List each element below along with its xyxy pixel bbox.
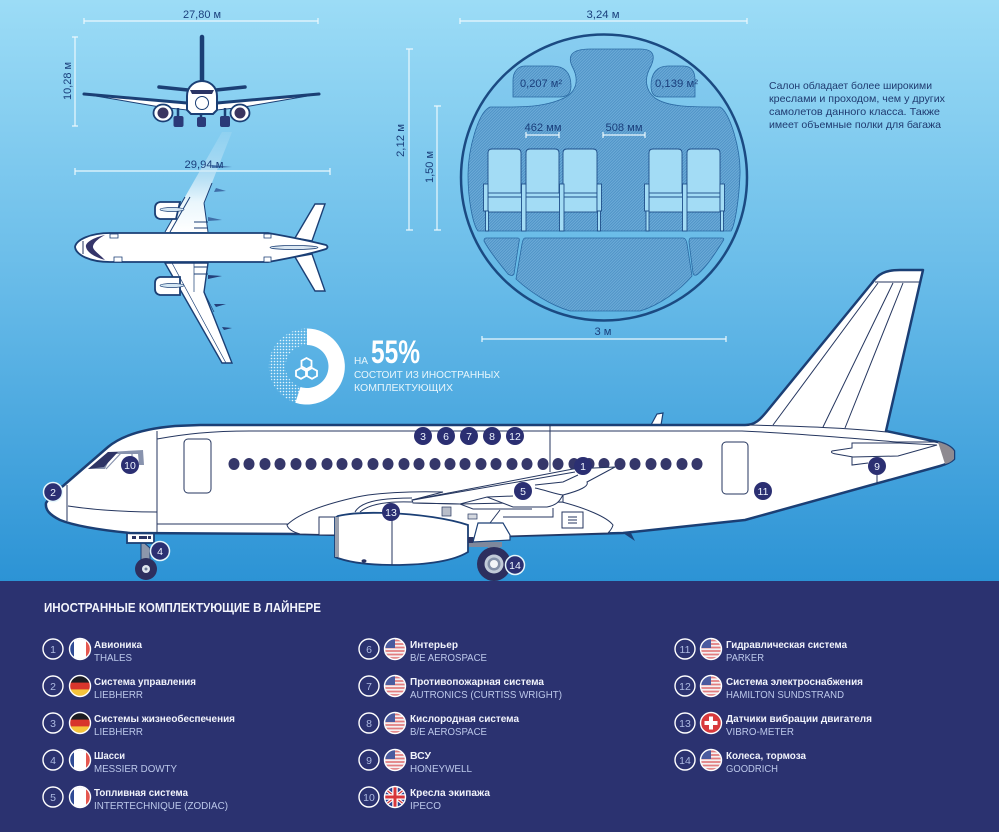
upper wing faded [165,132,232,232]
lower right bay [689,238,724,275]
tail cone [938,442,954,464]
legend column 2: B/E AEROSPACE [410,652,487,664]
legend column 3 [675,638,872,775]
lower left bay [484,238,519,276]
legend column 1: Системы жизнеобеспечения [94,713,235,725]
legend column 2: Противопожарная система [410,676,544,688]
seat width labels [524,122,645,138]
doors [184,439,211,493]
legend column 2: HONEYWELL [410,763,472,775]
legend column 2: ВСУ [410,750,431,762]
callout badges on aircraft: 10 [124,460,136,472]
seat width labels: 462 мм [524,122,562,134]
callout badges on aircraft: 9 [874,461,880,473]
callout badges on aircraft: 4 [157,546,163,558]
callout badges on aircraft [44,427,886,574]
engine [319,517,335,535]
legend column 3: GOODRICH [726,763,778,775]
dimension: height [62,37,78,126]
wing details [442,507,451,516]
fuselage lines [67,425,937,533]
horizontal stabiliser [832,443,937,457]
dimension: height: 10,28 м [62,62,74,100]
callout badges on aircraft: 8 [489,431,495,443]
overhead volumes: 0,139 м² [655,78,698,90]
dimension: cabin outer width [460,9,747,24]
legend column 2: Интерьер [410,639,458,651]
dimension: top view length [75,168,330,175]
legend column 2: 7 [366,681,372,693]
dimension: floor width [482,326,726,342]
callout badges on aircraft: 7 [466,431,472,443]
fuselage cross-section [461,34,747,320]
dimension: seat level height: 1,50 м [424,151,436,183]
callout badges on aircraft: 11 [758,486,769,498]
winglet [651,413,663,425]
legend column 2: 9 [366,755,372,767]
legend column 1: 2 [50,681,56,693]
dimension: seat level height [424,106,441,230]
nose gear [127,532,157,580]
55 percent text: НА [354,355,368,367]
fuselage and fin [46,270,954,538]
dimension: cabin height [395,49,413,230]
55 percent text: КОМПЛЕКТУЮЩИХ [354,382,453,394]
legend column 2: 8 [366,718,372,730]
dimension: cabin outer width: 3,24 м [586,9,620,21]
dimension: cabin height: 2,12 м [395,124,407,157]
legend column 2 [359,638,562,812]
cabin description: самолетов данного класса. Также [769,106,940,118]
legend column 1: 1 [50,644,56,656]
legend column 1: Топливная система [94,787,188,799]
cabin description: имеет объемные полки для багажа [769,119,941,131]
panel: foreign components legend [0,581,999,832]
seats left row [484,149,602,231]
overhead bin right [651,66,695,97]
label: top view length: 29,94 м [184,159,224,171]
legend column 3: HAMILTON SUNDSTRAND [726,689,844,701]
lower wing [165,263,232,363]
callout badges on aircraft: 1 [580,461,586,473]
wing [412,467,615,507]
overhead volumes: 0,207 м² [520,78,562,90]
top view aircraft [75,132,328,363]
callout badges on aircraft: 5 [520,486,526,498]
cabin space [468,49,740,231]
cabin description: креслами и проходом, чем у других [769,93,946,105]
legend column 1: INTERTECHNIQUE (ZODIAC) [94,800,228,812]
sky background [0,0,999,582]
legend column 1: 3 [50,718,56,730]
legend heading: ИНОСТРАННЫЕ КОМПЛЕКТУЮЩИЕ В ЛАЙНЕРЕ [44,600,321,615]
dimension: front view wingspan: 27,80 м [183,9,221,21]
legend column 1: 5 [50,792,56,804]
legend column 3: Гидравлическая система [726,639,847,651]
legend column 3: 13 [679,718,691,730]
legend column 3: Колеса, тормоза [726,750,806,762]
front view aircraft [84,37,319,127]
legend column 1: Система управления [94,676,196,688]
legend column 1: THALES [94,652,132,664]
side view aircraft [46,270,954,581]
callout badges on aircraft: 6 [443,431,449,443]
legend column 2: AUTRONICS (CURTISS WRIGHT) [410,689,562,701]
dimension: floor width: 3 м [594,326,612,338]
cabin description [769,80,946,131]
legend column 2: Кресла экипажа [410,787,490,799]
upper engine [155,202,180,219]
legend column 3: 11 [680,644,691,656]
legend column 3: 14 [679,755,691,767]
overhead bin left [513,66,571,97]
legend column 1: Шасси [94,750,125,762]
55 percent text: 55% [371,334,420,370]
fuselage [75,233,328,262]
cargo hold [516,238,692,311]
wing root fairing [287,492,613,538]
legend column 1: LIEBHERR [94,726,143,738]
legend column 3: VIBRO-METER [726,726,794,738]
passenger windows [228,458,702,470]
callout badges on aircraft: 3 [420,431,426,443]
lower engine [155,277,180,295]
callout badges on aircraft: 13 [385,507,397,519]
legend column 1: 4 [50,755,56,767]
legend column 3: Датчики вибрации двигателя [726,713,872,725]
callout badges on aircraft: 14 [509,560,521,572]
legend column 3: 12 [679,681,691,693]
tailplanes [295,204,325,241]
icon: hexagons [296,358,317,379]
seats right row [644,149,724,231]
legend column 1: MESSIER DOWTY [94,763,177,775]
55 percent text: СОСТОИТ ИЗ ИНОСТРАННЫХ [354,369,500,381]
cabin description: Салон обладает более широкими [769,80,932,92]
seat width labels: 508 мм [606,122,642,134]
legend column 1: LIEBHERR [94,689,143,701]
legend column 3: Система электроснабжения [726,676,863,688]
legend column 3: PARKER [726,652,764,664]
legend column 2: 6 [366,644,372,656]
overhead volumes [520,78,698,90]
55 percent text [354,334,500,394]
legend column 1: Авионика [94,639,142,651]
callout badges on aircraft: 12 [509,431,521,443]
legend column 2: B/E AEROSPACE [410,726,487,738]
55 percent donut [269,328,345,404]
main gear [468,542,511,581]
cockpit windows [88,450,144,469]
callout badges on aircraft: 2 [50,487,56,499]
legend column 2: Кислородная система [410,713,519,725]
legend column 2: 10 [363,792,375,804]
main gear door [473,523,510,542]
legend column 1 [43,638,235,812]
legend column 2: IPECO [410,800,441,812]
dimension: front view wingspan [84,9,318,24]
